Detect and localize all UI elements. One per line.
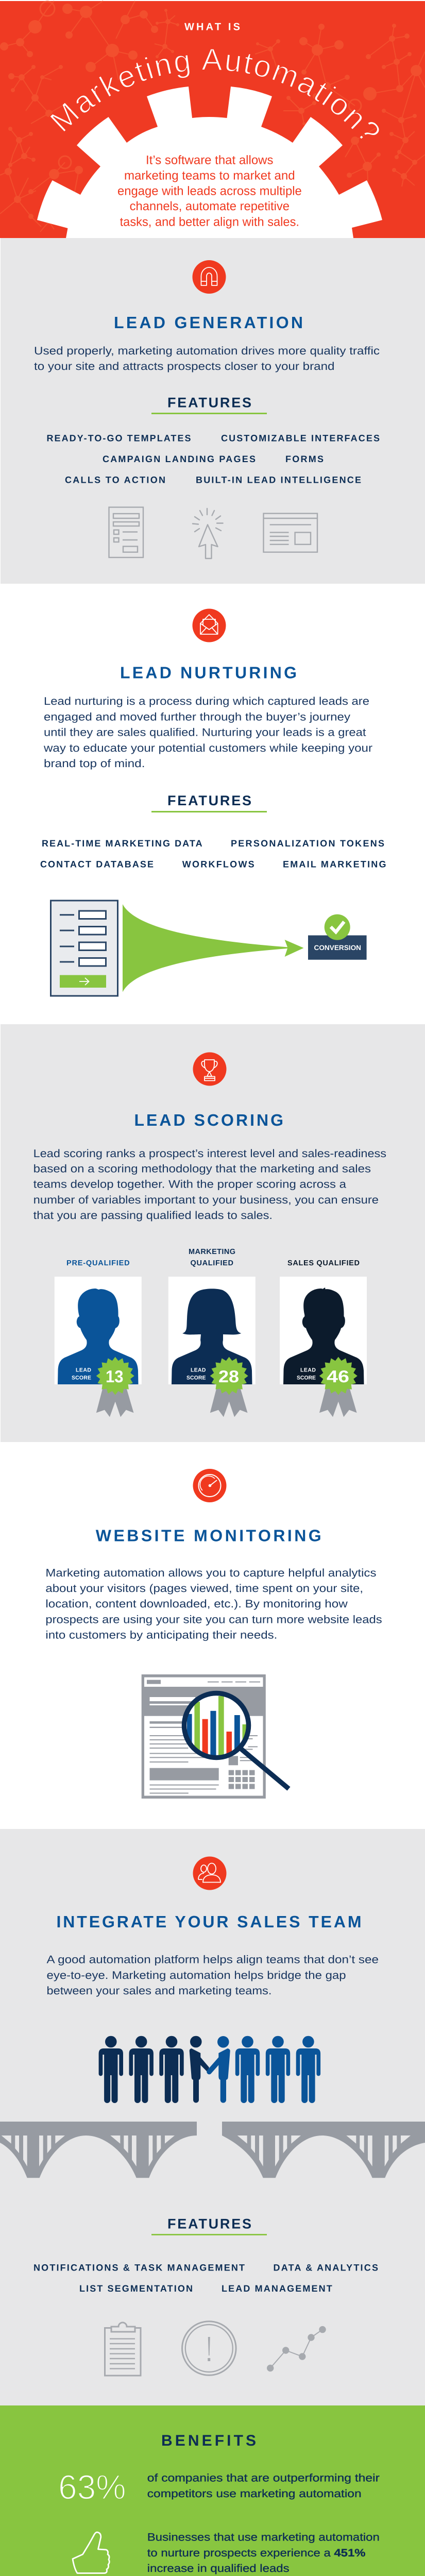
icon: people [193, 1857, 227, 1890]
panel: integrate your sales team [0, 1829, 425, 2405]
features heading: FEATURES [167, 2216, 251, 2232]
icon: browser [264, 514, 317, 552]
body text: engaged and moved further through the buyer’s journey [44, 711, 350, 723]
body text [46, 1954, 379, 1997]
card: sales qualified: SALES QUALIFIED [287, 1259, 360, 1267]
features list: CUSTOMIZABLE INTERFACES [221, 433, 380, 443]
icon: magnet [193, 260, 226, 294]
card: sales qualified [280, 1259, 367, 1417]
heading: INTEGRATE YOUR SALES TEAM [57, 1912, 362, 1931]
card: sales qualified: 46 [327, 1367, 349, 1386]
analytics illustration [142, 1674, 288, 1799]
intro paragraph: engage with leads across multiple [117, 184, 302, 198]
features list [33, 2263, 378, 2294]
body text: based on a scoring methodology that the marketing and sales [33, 1163, 371, 1175]
features list: CALLS TO ACTION [65, 475, 165, 485]
features list: LEAD MANAGEMENT [222, 2283, 332, 2294]
features list: FORMS [285, 454, 324, 464]
features list: CAMPAIGN LANDING PAGES [103, 454, 256, 464]
stat: 63%: of companies that are outperforming their [147, 2472, 380, 2484]
icon: cursor [193, 509, 223, 558]
card: marketing qualified: 28 [218, 1367, 239, 1386]
features list: EMAIL MARKETING [283, 859, 386, 870]
card: sales qualified: LEAD [300, 1367, 316, 1374]
features heading [151, 395, 267, 414]
card: sales qualified: SCORE [297, 1375, 316, 1381]
card: marketing qualified [168, 1248, 256, 1417]
panel: lead generation [1, 238, 425, 584]
heading: LEAD SCORING [134, 1111, 283, 1129]
card: marketing qualified: MARKETING [189, 1248, 235, 1256]
icon: envelope [193, 609, 226, 642]
body text: Lead scoring ranks a prospect’s interest level and sales-readiness [33, 1147, 386, 1160]
features list: WORKFLOWS [182, 859, 254, 870]
icon: form [109, 507, 143, 557]
panel: website monitoring [45, 1469, 382, 1799]
body text: that you are passing qualified leads to sales. [33, 1209, 273, 1222]
body text: teams develop together. With the proper scoring across a [33, 1178, 346, 1190]
features heading [151, 793, 267, 812]
card: pre-qualified: 13 [106, 1367, 124, 1386]
card: marketing qualified: SCORE [186, 1375, 206, 1381]
bridge: right span [222, 2122, 425, 2178]
body text: brand top of mind. [44, 757, 145, 770]
stat: 63%: competitors use marketing automation [147, 2488, 362, 2500]
features list: READY-TO-GO TEMPLATES [46, 433, 191, 443]
body text: into customers by anticipating their needs. [45, 1629, 277, 1641]
body text: prospects are using your site you can turn more website leads [45, 1614, 382, 1626]
team of people shaking hands [99, 2036, 320, 2103]
form illustration [50, 901, 117, 996]
heading: LEAD NURTURING [120, 664, 297, 682]
body text: Marketing automation allows you to capture helpful analytics [45, 1567, 376, 1579]
icon: clipboard [105, 2323, 141, 2376]
features list: REAL-TIME MARKETING DATA [42, 838, 202, 849]
intro paragraph [117, 153, 302, 229]
body text: to your site and attracts prospects closer to your brand [34, 360, 335, 372]
magnifying glass [184, 1693, 288, 1789]
features list: PERSONALIZATION TOKENS [231, 838, 384, 849]
intro paragraph: tasks, and better align with sales. [120, 215, 299, 229]
heading: BENEFITS [161, 2432, 256, 2449]
body text [43, 695, 372, 770]
body text [34, 345, 380, 372]
heading: WEBSITE MONITORING [96, 1526, 321, 1545]
intro paragraph: marketing teams to market and [124, 168, 295, 182]
intro paragraph: It’s software that allows [146, 153, 273, 167]
icon: line chart [267, 2326, 326, 2371]
stat: thumbs up: Businesses that use marketing automation [147, 2531, 380, 2543]
stat: 63% [58, 2468, 380, 2507]
body text: Used properly, marketing automation drives more quality traffic [34, 345, 380, 357]
card: pre-qualified: LEAD [76, 1367, 91, 1374]
features heading: FEATURES [167, 793, 251, 808]
features list: DATA & ANALYTICS [273, 2263, 378, 2273]
stat: thumbs up: increase in qualified leads [147, 2563, 290, 2574]
features list [46, 433, 380, 485]
card: marketing qualified: QUALIFIED [191, 1259, 233, 1267]
body text: location, content downloaded, etc.). By monitoring how [45, 1598, 348, 1610]
features list: NOTIFICATIONS & TASK MANAGEMENT [33, 2263, 245, 2273]
stat: thumbs up [73, 2531, 380, 2574]
body text: eye-to-eye. Marketing automation helps bridge the gap [46, 1969, 346, 1981]
card: pre-qualified [55, 1259, 142, 1417]
features list: CONTACT DATABASE [40, 859, 154, 870]
panel: hero [0, 1, 425, 238]
bridge: left span [0, 2122, 197, 2178]
body text: until they are sales qualified. Nurturing your leads is a great [44, 726, 366, 739]
what is label: WHAT IS [184, 22, 240, 33]
features list: LIST SEGMENTATION [79, 2283, 193, 2294]
body text: Lead nurturing is a process during which captured leads are [44, 695, 369, 707]
body text [45, 1567, 382, 1641]
body text: between your sales and marketing teams. [46, 1985, 271, 1997]
body text: A good automation platform helps align teams that don’t see [46, 1954, 379, 1966]
conversion box: CONVERSION [314, 944, 361, 952]
card: marketing qualified: LEAD [191, 1367, 206, 1374]
body text [33, 1147, 386, 1222]
stat: 63%: 63% [58, 2468, 126, 2507]
features heading: FEATURES [167, 395, 251, 410]
stat: thumbs up: to nurture prospects experience a 451% [147, 2547, 366, 2559]
card: pre-qualified: SCORE [72, 1375, 91, 1381]
panel: benefits [0, 2405, 425, 2576]
curved title: Marketing Automation? [49, 49, 379, 139]
panel: lead nurturing [40, 609, 386, 996]
card: pre-qualified: PRE-QUALIFIED [66, 1259, 130, 1267]
conversion box [308, 914, 367, 960]
panel: lead scoring [1, 1024, 425, 1442]
body text: about your visitors (pages viewed, time spent on your site, [45, 1582, 363, 1595]
heading: LEAD GENERATION [114, 313, 303, 332]
icon: alert [182, 2321, 236, 2375]
body text: number of variables important to your business, you can ensure [33, 1194, 379, 1206]
features list: BUILT-IN LEAD INTELLIGENCE [196, 475, 361, 485]
icon: trophy [193, 1052, 227, 1086]
gear shape [37, 87, 382, 238]
body text: way to educate your potential customers while keeping your [43, 742, 372, 754]
funnel arrow [123, 904, 304, 992]
intro paragraph: channels, automate repetitive [130, 199, 290, 213]
icon: gauge [193, 1469, 227, 1502]
features list [40, 838, 386, 870]
